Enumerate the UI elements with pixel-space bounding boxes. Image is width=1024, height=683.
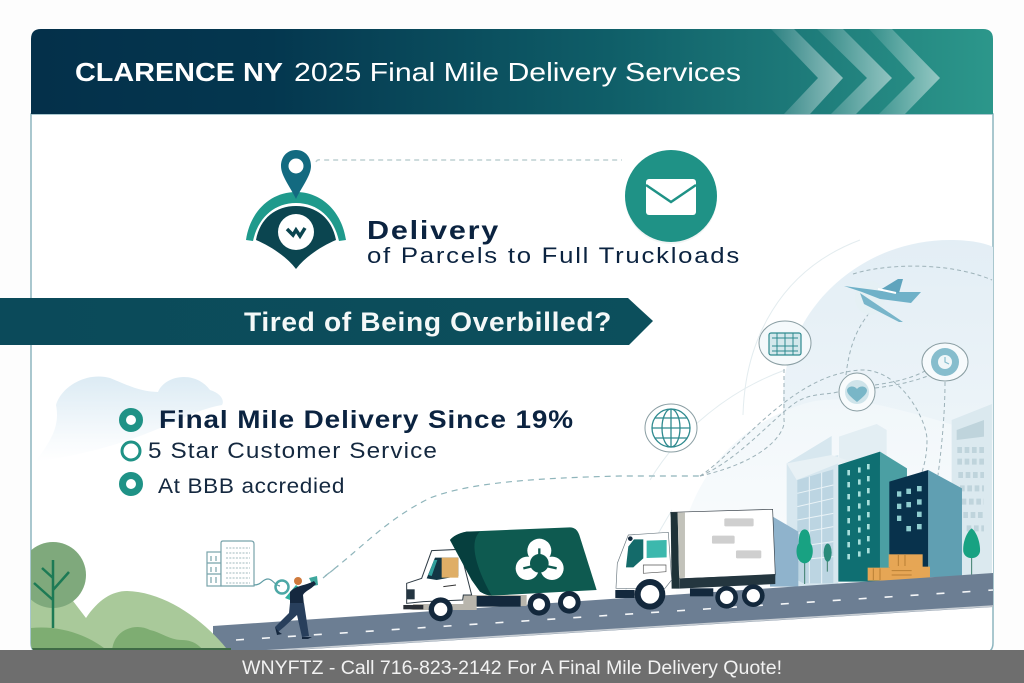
navy tower (889, 470, 962, 577)
dashed connector (316, 160, 622, 162)
truck 1 chassis (410, 595, 527, 610)
icon: heart (839, 373, 875, 411)
heading: delivery (367, 215, 741, 268)
icon: airplane (844, 279, 921, 322)
route dashes across the scene (700, 266, 992, 505)
truck 2 wheels (635, 579, 765, 610)
truck 1 cargo (450, 527, 597, 596)
header bar (31, 29, 993, 114)
icon: envelope circle (625, 150, 717, 244)
header subtitle: 2025 Final Mile Delivery Services (294, 57, 741, 87)
truck: recycling (403, 527, 597, 621)
truck 1 cab (403, 549, 472, 609)
subheading: of Parcels to Full Truckloads (367, 243, 741, 268)
icon: globe (645, 404, 697, 452)
icon: recycling symbol (516, 539, 564, 580)
icon: clock (922, 343, 968, 381)
truck 2 cab (615, 532, 672, 598)
trees (797, 528, 980, 584)
banner: tired of being overbilled: Tired of Being Overbilled? (244, 307, 612, 337)
banner: tired of being overbilled (0, 298, 653, 345)
person pulling package (275, 576, 318, 639)
small office building (207, 541, 280, 586)
truck: box (615, 509, 775, 610)
panel: main card (31, 114, 993, 653)
teal tower (838, 452, 907, 582)
back left glass building (787, 424, 887, 587)
road (213, 573, 993, 654)
footer bar (0, 650, 1024, 683)
truck 1 wheels (429, 591, 581, 621)
delivery boxes (868, 554, 930, 581)
bullet: customer service: 5 Star Customer Service (148, 438, 438, 463)
header title: CLARENCE NY (75, 57, 283, 87)
network icons (645, 279, 968, 452)
building behind truck (770, 515, 798, 587)
truck 2 box (671, 509, 775, 596)
chevrons (771, 29, 940, 114)
bullet: final mile: Final Mile Delivery Since 19% (159, 406, 574, 434)
clouds (35, 377, 223, 462)
green hills and tree (20, 542, 231, 653)
icon: location pin on dome (246, 150, 346, 269)
city skyline (770, 404, 992, 587)
background sky shapes (620, 240, 993, 600)
bullet: BBB: At BBB accredied (158, 475, 345, 498)
icon: warehouse (759, 321, 811, 365)
footer bar: WNYFTZ - Call 716-823-2142 For A Final Mile Delivery Quote! (242, 658, 782, 679)
feature list (122, 406, 574, 498)
back right building (952, 404, 992, 575)
heading: delivery: Delivery (367, 215, 500, 245)
